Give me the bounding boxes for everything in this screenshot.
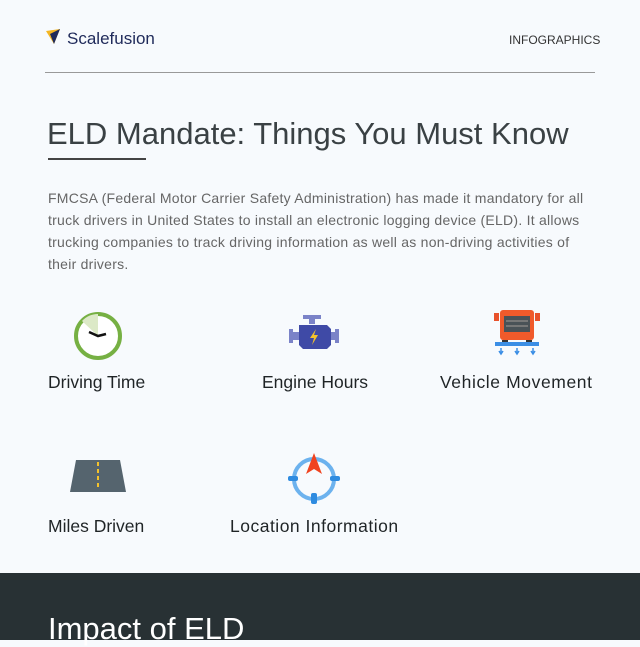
header label: INFOGRAPHICS — [509, 33, 600, 47]
item: miles driven — [48, 460, 144, 536]
dark section: impact of ELD: Impact of ELD — [48, 611, 244, 646]
title: ELD Mandate: Things You Must Know — [47, 116, 569, 151]
dark section: impact of ELD — [0, 573, 640, 640]
logo: Scalefusion — [67, 29, 155, 48]
item: location information — [230, 453, 399, 536]
item: vehicle movement: Vehicle Movement — [440, 372, 593, 392]
item: location information: Location Information — [230, 516, 399, 536]
item: miles driven: Miles Driven — [48, 516, 144, 536]
item: engine hours — [262, 315, 368, 392]
item: driving time: Driving Time — [48, 372, 145, 392]
item: driving time — [48, 312, 145, 392]
item: engine hours: Engine Hours — [262, 372, 368, 392]
item: vehicle movement — [440, 310, 593, 392]
intro text: FMCSA (Federal Motor Carrier Safety Administration) has made it mandatory for all truck drivers in United States to install an electronic logging device (ELD). It allows trucking companies to track driving information as well as non-driving activities of their drivers. — [48, 190, 583, 272]
